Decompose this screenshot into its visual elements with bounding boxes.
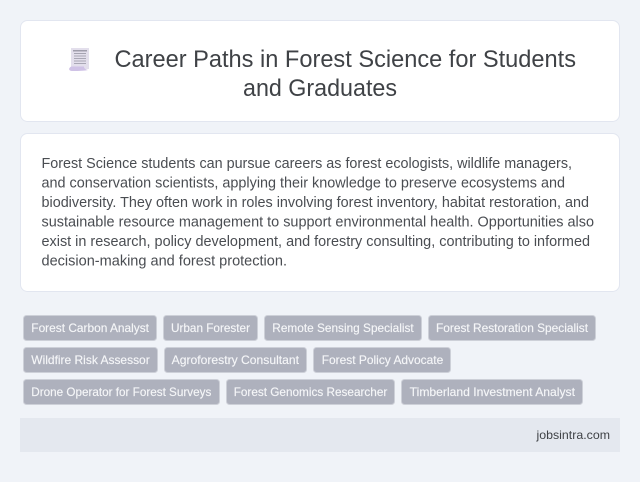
tag: Forest Carbon Analyst: [24, 316, 156, 340]
text block: description: Forest Science students can pursue careers as forest ecologists, wildlife managers,: [42, 156, 572, 172]
tag: Remote Sensing Specialist: [264, 316, 422, 340]
tag: Forest Restoration Specialist: [428, 316, 596, 340]
panel: description card: [20, 134, 620, 292]
icon: paper scroll: [69, 48, 89, 71]
tag: Wildfire Risk Assessor: Wildfire Risk Assessor: [31, 353, 150, 367]
tag: Forest Genomics Researcher: Forest Genomics Researcher: [234, 385, 387, 399]
tag: Timberland Investment Analyst: [402, 380, 582, 404]
tag: Forest Policy Advocate: Forest Policy Advocate: [322, 353, 444, 367]
tag: Forest Genomics Researcher: [226, 380, 394, 404]
text block: description: biodiversity. They often work in roles involving forest inventory, habitat restoration, and: [42, 195, 589, 211]
footer text: site name: jobsintra.com: [535, 428, 610, 442]
text block: description: [42, 156, 594, 270]
tag: Urban Forester: [164, 316, 258, 340]
tag: Forest Carbon Analyst: Forest Carbon Analyst: [31, 321, 150, 335]
text block: description: and conservation scientists, applying their knowledge to preserve ecosystems and: [42, 176, 565, 192]
tag: Agroforestry Consultant: [164, 348, 306, 372]
tag: Drone Operator for Forest Surveys: Drone Operator for Forest Surveys: [31, 385, 211, 399]
tag: Forest Restoration Specialist: Forest Restoration Specialist: [436, 321, 589, 335]
tag: Urban Forester: Urban Forester: [171, 321, 250, 335]
tag: Forest Policy Advocate: [314, 348, 450, 372]
tag: Wildfire Risk Assessor: [24, 348, 158, 372]
tag: Timberland Investment Analyst: Timberland Investment Analyst: [410, 385, 576, 399]
panel: header card: [20, 20, 620, 122]
text block: description: exist in research, policy development, and forestry consulting, contributing to informed: [42, 234, 590, 250]
text block: description: sustainable resource management to support environmental health. Opportunities also: [42, 214, 594, 230]
tag: Drone Operator for Forest Surveys: [24, 380, 220, 404]
tag group: career paths: [24, 316, 596, 404]
tag: Agroforestry Consultant: Agroforestry Consultant: [172, 353, 300, 367]
tag: Remote Sensing Specialist: Remote Sensing Specialist: [272, 321, 414, 335]
title: and Graduates: [243, 75, 397, 102]
title: Career Paths in Forest Science for Students: [114, 46, 576, 73]
footer bar: [20, 418, 620, 452]
text block: description: decision-making and forest protection.: [42, 254, 287, 270]
title: [114, 46, 576, 102]
